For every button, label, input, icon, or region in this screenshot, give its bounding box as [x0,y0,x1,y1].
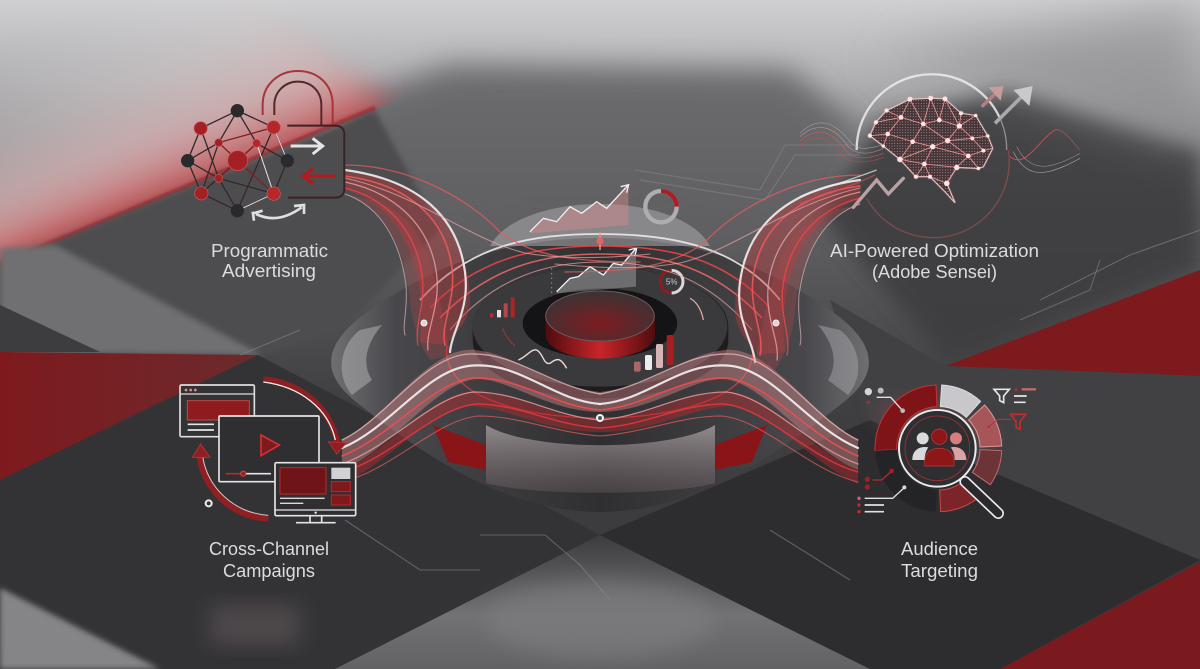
icon: programmatic network and lock [181,71,344,221]
lock shackle and body [263,71,344,198]
monitor [275,463,356,523]
upper line chart [530,185,629,233]
label: audience targeting [901,539,978,581]
platform: glass base [331,204,869,512]
label: cross-channel campaigns: Campaigns [223,561,315,581]
zigzag trend [853,178,903,207]
flow ribbon: lower right [600,350,858,484]
halo circle [857,74,1009,238]
cycle arrows [192,379,347,518]
gauge 5% [660,270,683,293]
label: audience targeting: Audience [901,539,978,559]
label: AI-powered optimization [830,241,1039,282]
flow rings [420,232,780,418]
label: cross-channel campaigns: Cross-Channel [209,539,329,559]
lower line chart [557,248,637,293]
wave lines [800,123,1080,203]
small bars [490,297,515,317]
label: programmatic advertising: Programmatic [211,241,328,261]
upper donut [645,191,677,222]
flow nodes [421,320,779,421]
center puck [546,291,655,359]
magnifier [899,410,998,513]
gauge 5%: 5% [666,278,677,287]
funnel icons and labels [857,388,1036,513]
disk body [473,267,728,398]
video window [219,416,319,482]
arrows [253,138,335,221]
flow ribbon: lower left [342,350,600,484]
central disk with charts [473,185,728,398]
disk hole [523,288,677,358]
label: cross-channel campaigns [209,539,329,581]
3d bars [634,335,674,372]
label: programmatic advertising [211,241,328,281]
browser window [180,385,254,437]
growth arrows [982,86,1033,123]
label: AI-powered optimization: (Adobe Sensei) [872,262,997,282]
wave sparkline [518,350,567,368]
icon: cross-channel screens [180,379,356,523]
icon: AI brain [800,74,1080,238]
label: audience targeting: Targeting [901,561,978,581]
label: AI-powered optimization: AI-Powered Optimization [830,241,1039,261]
flow ribbon: upper left [345,165,650,360]
label: programmatic advertising: Advertising [222,261,316,281]
network lines [188,111,287,211]
network nodes [194,121,280,200]
flow ribbon: upper right [555,175,860,370]
brain [868,96,993,203]
audience people [912,429,966,466]
donut segments [875,385,1002,512]
icon: audience targeting [857,385,1036,513]
